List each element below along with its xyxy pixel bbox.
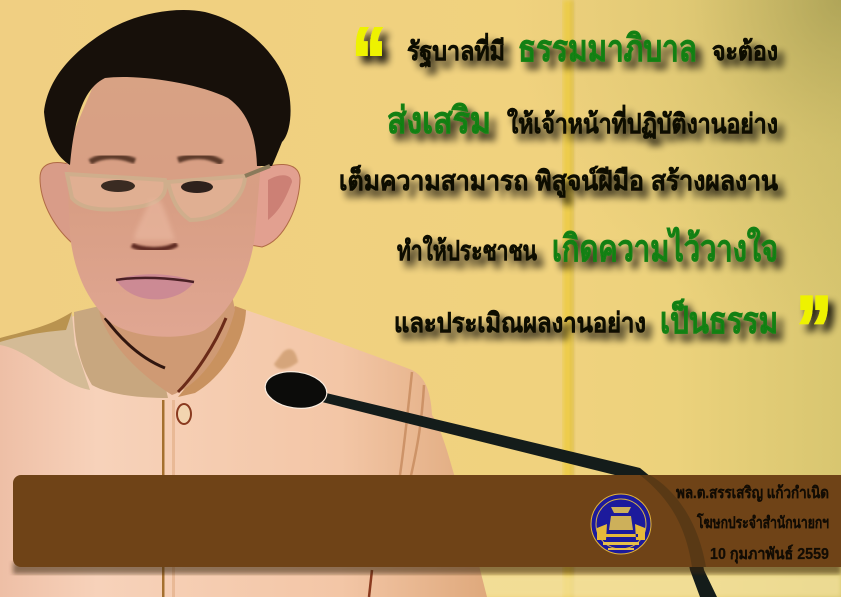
neck bbox=[95, 285, 235, 395]
closing quote mark: ” bbox=[796, 278, 832, 380]
left ear bbox=[40, 163, 72, 243]
line 1 bbox=[407, 32, 778, 69]
right ear bbox=[250, 164, 300, 247]
nose bbox=[132, 244, 177, 249]
caption: speaker details bbox=[676, 484, 829, 564]
shirt bbox=[0, 305, 487, 597]
face bbox=[66, 70, 262, 337]
line 4: เกิดความไว้วางใจ bbox=[552, 226, 778, 269]
line 2 bbox=[387, 100, 778, 141]
line 4: ทำให้ประชาชน bbox=[397, 235, 537, 266]
hair bbox=[44, 10, 291, 166]
person portrait bbox=[0, 10, 487, 597]
green term 1: ธรรมมาภิบาล bbox=[518, 28, 697, 69]
eyebrows bbox=[90, 156, 222, 163]
line 1: จะต้อง bbox=[712, 36, 778, 66]
line 5 bbox=[394, 297, 778, 341]
line 2: ส่งเสริม bbox=[387, 100, 491, 141]
line 3: เต็มความสามารถ พิสูจน์ฝีมือ สร้างผลงาน bbox=[339, 163, 778, 198]
opening quote mark: “ bbox=[352, 10, 386, 112]
microphone bbox=[263, 368, 717, 597]
line 5: เป็นธรรม bbox=[660, 297, 778, 341]
eyes bbox=[101, 180, 135, 192]
line 5: และประเมิณผลงานอย่าง bbox=[394, 308, 646, 338]
collar button bbox=[177, 404, 191, 424]
mouth bbox=[116, 274, 194, 299]
line 4 bbox=[397, 226, 778, 269]
glasses bbox=[67, 174, 245, 220]
bottom bar shadow bbox=[13, 562, 841, 574]
government seal bbox=[591, 494, 651, 554]
bottom caption bar bbox=[13, 475, 841, 567]
caption: speaker details: 10 กุมภาพันธ์ 2559 bbox=[710, 544, 829, 564]
quote text bbox=[339, 10, 832, 380]
line 1: รัฐบาลที่มี bbox=[407, 32, 505, 69]
line 2: ให้เจ้าหน้าที่ปฏิบัติงานอย่าง bbox=[507, 104, 778, 139]
